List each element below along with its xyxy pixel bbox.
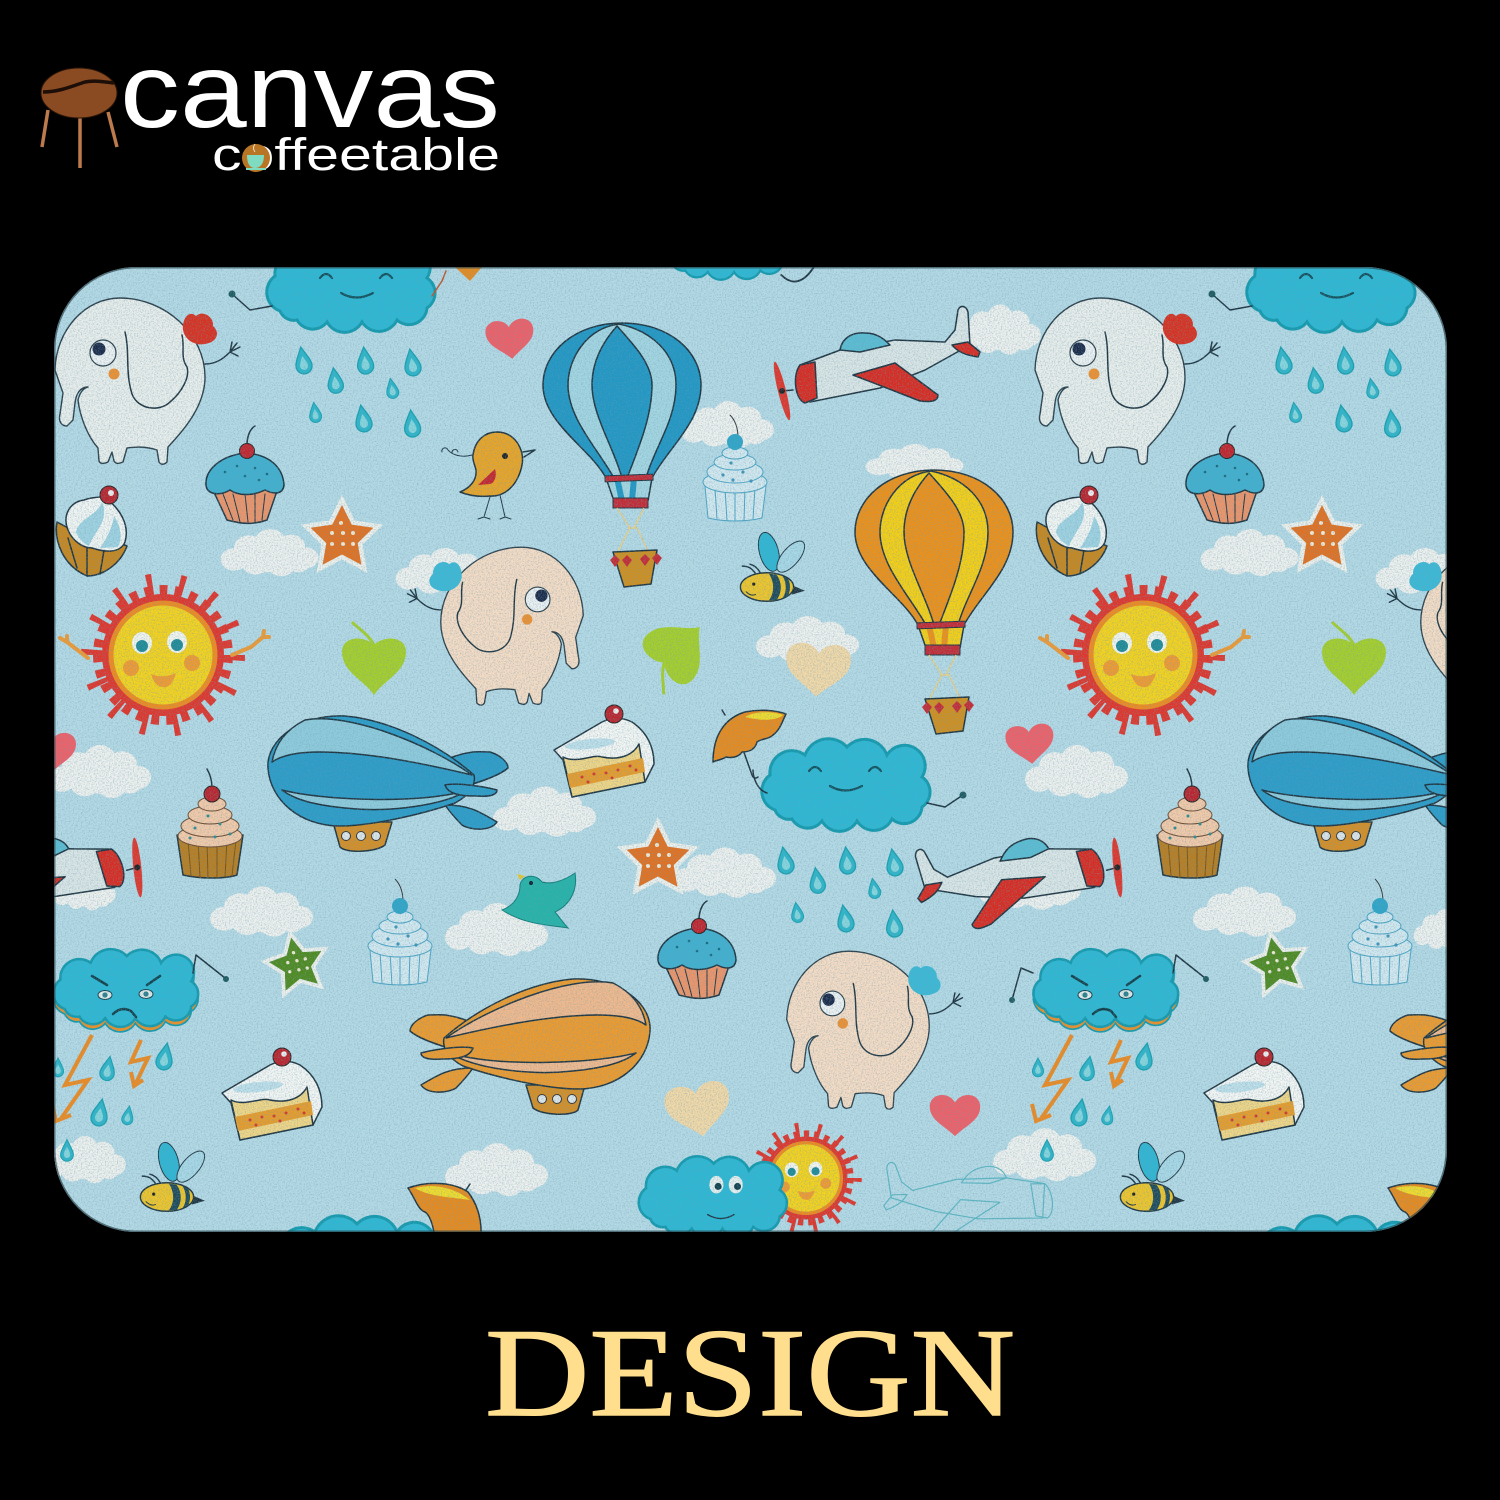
elephant: peach bottom — [787, 951, 962, 1109]
heading: DESIGN: DESIGN — [485, 1304, 1015, 1443]
cake slice: right — [1204, 1048, 1304, 1140]
bird: yellow — [442, 432, 535, 519]
icon: coffee cup — [242, 144, 270, 172]
star: orange centre — [627, 827, 689, 887]
cupcake: blue top — [206, 426, 284, 523]
plane: left edge — [54, 838, 142, 898]
cloud hugging sun — [639, 1156, 787, 1238]
happy cloud: bottom right partial — [1266, 1214, 1403, 1232]
cupcake: blue centre — [658, 901, 736, 998]
plane: ghost outline — [883, 1162, 1054, 1232]
icon: coffee bean table — [41, 68, 117, 168]
cupcake: swirl right — [1036, 486, 1107, 576]
happy cloud: top right — [1208, 267, 1417, 334]
storm left — [52, 1035, 175, 1161]
cupcake: peach right — [1157, 769, 1223, 878]
balloon: orange — [855, 470, 1013, 734]
star: orange left — [311, 505, 373, 565]
sun: right — [1040, 594, 1249, 716]
logo: canvas coffeetable — [41, 32, 500, 180]
happy cloud: top centre — [673, 267, 814, 282]
star: green right — [1245, 932, 1308, 993]
leaf: right — [1322, 622, 1386, 695]
bee: bottom left — [140, 1140, 210, 1211]
cupcake: outline right — [1348, 879, 1412, 985]
umbrella: bottom right — [1388, 1183, 1461, 1238]
cake slice: centre — [554, 705, 654, 797]
logo subtitle: coffeetable — [212, 129, 500, 180]
bee: bottom right — [1120, 1140, 1190, 1211]
rain drops: top left — [293, 346, 422, 438]
elephant: peach right edge — [1386, 562, 1447, 680]
star: green left — [265, 932, 328, 993]
happy cloud: centre — [753, 739, 966, 831]
canvas texture — [54, 267, 1447, 1232]
cupcake: peach left — [177, 769, 243, 878]
elephant: white left — [55, 298, 240, 464]
blimp: blue right — [1247, 715, 1447, 852]
happy cloud: top left — [228, 267, 447, 334]
cupcake: swirl left — [56, 486, 127, 576]
umbrella: bottom — [408, 1183, 481, 1238]
rain drops: top right — [1273, 346, 1402, 438]
blimp: blue — [268, 716, 508, 851]
angry cloud left — [29, 949, 229, 1032]
leaf: left — [342, 622, 406, 695]
mat edge shadow — [54, 267, 1447, 1232]
blimp: orange right — [1389, 1014, 1447, 1093]
balloon: blue — [543, 323, 701, 587]
leaf: centre — [626, 605, 722, 701]
hearts — [28, 317, 1056, 1142]
sun: left — [60, 594, 269, 716]
plane: top — [771, 306, 980, 421]
cupcake: outline top — [703, 415, 767, 521]
bird: teal — [502, 873, 576, 928]
cake slice: left — [222, 1048, 322, 1140]
elephant: peach centre — [408, 547, 583, 705]
happy cloud: bottom left partial — [286, 1214, 434, 1232]
star: orange right — [1291, 505, 1353, 565]
umbrella: centre — [713, 710, 786, 778]
sun: bottom behind cloud — [765, 1137, 847, 1219]
plane: lower facing right — [914, 838, 1122, 930]
bee: top — [740, 530, 810, 601]
angry cloud right — [1009, 949, 1209, 1032]
umbrella tip: top left — [455, 267, 482, 281]
logo wordmark: canvas — [120, 32, 500, 150]
elephant: white right — [1035, 298, 1220, 464]
rain drops: centre — [775, 846, 904, 938]
blimp: orange — [410, 979, 650, 1114]
storm right — [1032, 1035, 1155, 1161]
panel: bath mat with doodle pattern — [54, 267, 1447, 1232]
cupcake: blue top right — [1186, 426, 1264, 523]
mat background — [54, 267, 1447, 1232]
white clouds — [43, 304, 1476, 1196]
cupcake: outline lower — [368, 879, 432, 985]
